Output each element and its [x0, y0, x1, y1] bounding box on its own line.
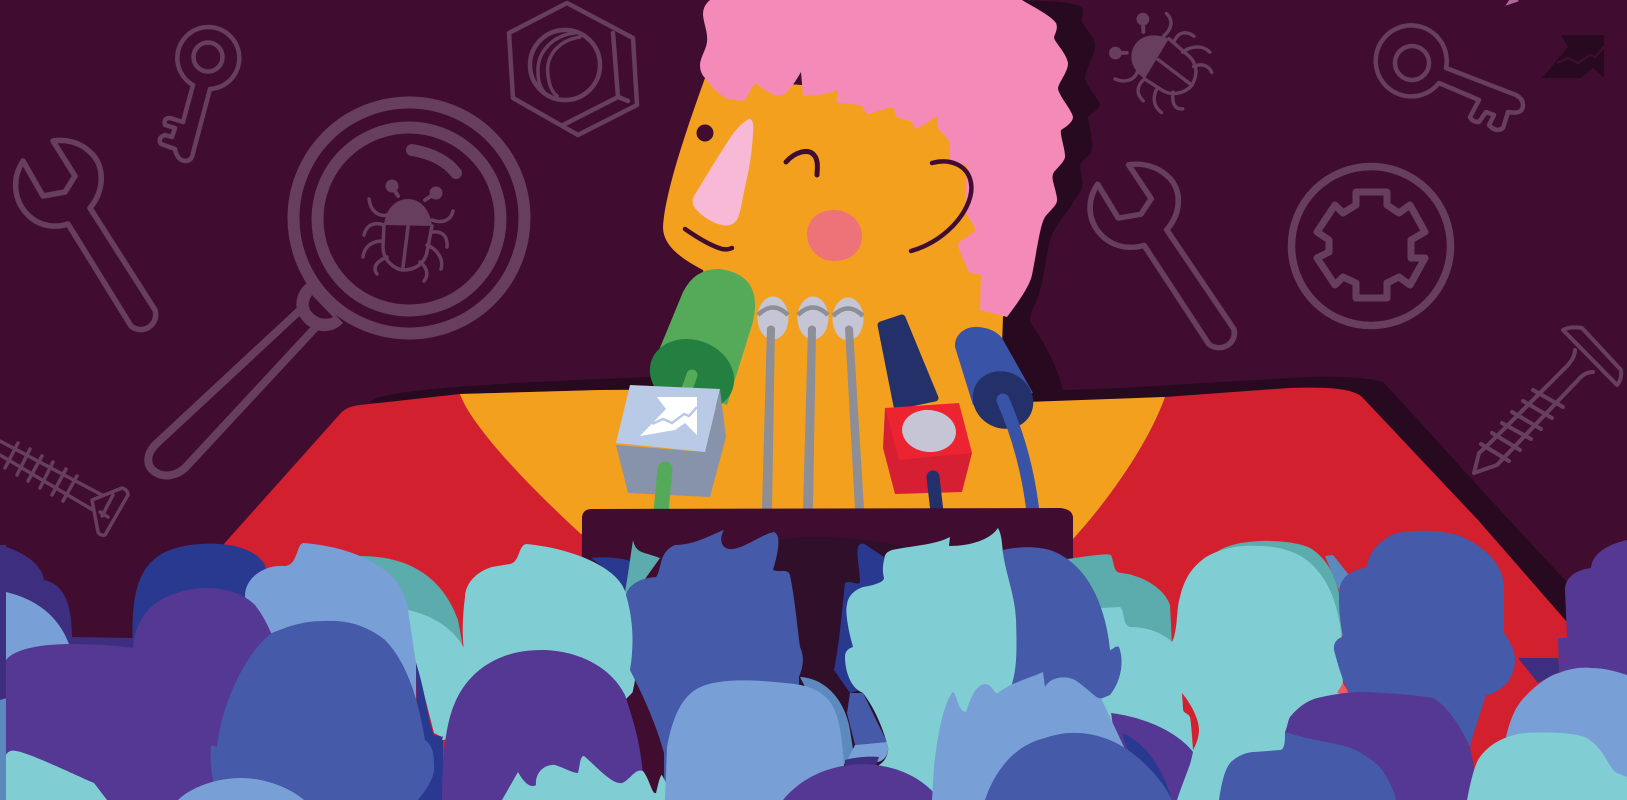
- microphones: three grey: [758, 296, 864, 509]
- head: navy center right: [834, 544, 890, 693]
- head: blue with spiky hair: [626, 530, 803, 800]
- shape: dark purple right: [1518, 658, 1560, 683]
- shape: blue collar: [847, 693, 887, 745]
- head: blue behind teal: [1000, 547, 1122, 700]
- head: dark purple left: [0, 545, 135, 700]
- head: purple center right: [1111, 713, 1193, 800]
- head: light blue center spiky: [932, 672, 1130, 800]
- icon: bug top right: [1096, 0, 1226, 124]
- icon: wrench left: [16, 140, 156, 330]
- microphone: box with logo: [616, 385, 726, 512]
- head: light teal center-left: [442, 544, 637, 740]
- microphone: blue: [955, 327, 1044, 512]
- shape: plum gap: [625, 692, 665, 800]
- head: light blue far right: [1506, 668, 1627, 780]
- head: teal tuft center: [625, 540, 660, 600]
- speaker shadow: shoulders: [370, 377, 1570, 640]
- head: light teal behind: [408, 610, 480, 737]
- head: purple left: [6, 588, 276, 800]
- icon: logo top right: [1542, 35, 1604, 78]
- icon: gear in circle: [1292, 166, 1450, 326]
- head: large teal right: [1172, 546, 1350, 800]
- speaker head and body: [460, 78, 1165, 540]
- head: small light blue left: [6, 592, 71, 665]
- head: teal right back: [1060, 554, 1172, 650]
- icon: screw right: [1474, 327, 1621, 473]
- head: dark teal right: [1217, 541, 1343, 650]
- shape: pink sliver: [1337, 683, 1350, 695]
- head: purple right low: [1285, 692, 1480, 800]
- shape: light blue collar: [845, 742, 888, 765]
- head: navy small center: [591, 557, 634, 595]
- icon: key top left: [160, 27, 239, 161]
- head: teal back: [360, 556, 465, 660]
- icon: magnifying glass with bug: [148, 102, 524, 475]
- icon: stray mark top: [1509, 0, 1518, 3]
- head: purple far right: [1558, 540, 1627, 680]
- head: navy center right low: [1122, 733, 1172, 800]
- head: far-left strip: [0, 545, 6, 800]
- head: light blue bottom left: [178, 778, 304, 800]
- head: teal bottom left: [6, 751, 107, 800]
- audience: [0, 528, 1627, 800]
- microphone: green: [640, 269, 755, 423]
- head: purple bottom center: [783, 764, 940, 800]
- icon: hex nut: [509, 3, 637, 135]
- speaker face: [685, 119, 971, 261]
- speaker hair: [700, 0, 1073, 317]
- head: light blue center: [665, 680, 845, 800]
- head: light blue with tuft: [245, 543, 416, 700]
- icon: key top right: [1376, 25, 1523, 130]
- head: light teal right: [1090, 607, 1240, 800]
- icon: wrench right: [1090, 164, 1234, 348]
- head: teal center: [845, 528, 1016, 800]
- icon: screw left: [0, 441, 128, 535]
- head: light blue tuft right: [1325, 555, 1349, 600]
- shape: red slit: [1182, 693, 1199, 750]
- speaker jacket: [223, 388, 1567, 800]
- head: purple front: [442, 650, 645, 800]
- head: navy left: [132, 544, 272, 650]
- head: navy sliver: [416, 663, 443, 800]
- head: large blue: [211, 621, 434, 800]
- speaker shadow: hair and neck: [980, 0, 1100, 420]
- head: teal far right: [1467, 732, 1627, 800]
- microphone: navy and red: [881, 318, 972, 512]
- shape: dark purple collar: [845, 757, 879, 768]
- head: blue front right: [1219, 732, 1396, 800]
- head: blue right: [1334, 531, 1515, 800]
- head: blue front center: [985, 733, 1172, 800]
- podium: [581, 508, 1073, 800]
- head: mid blue: [800, 677, 855, 765]
- head: teal bottom hair: [502, 756, 675, 800]
